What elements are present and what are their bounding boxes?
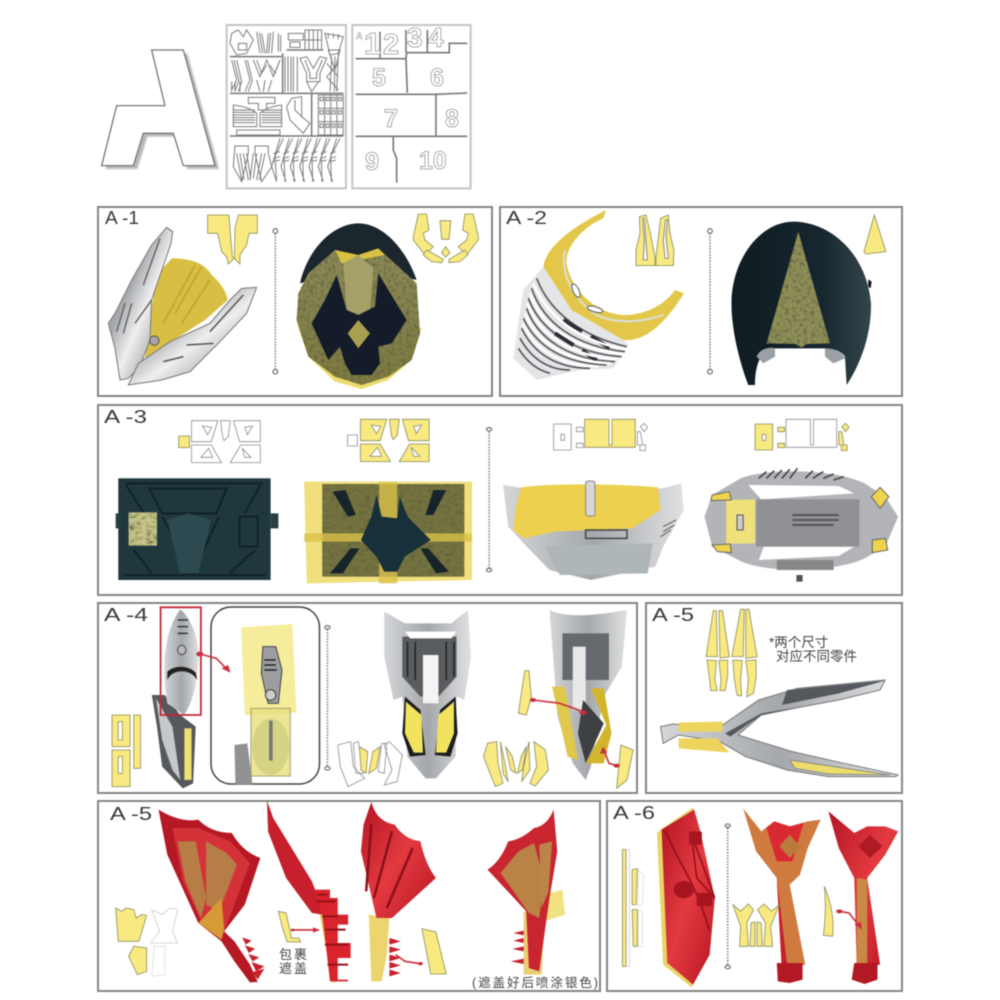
sheet: numbered section map: A: [356, 31, 363, 41]
sheet: numbered section map: 10: [419, 147, 447, 175]
sheet: numbered section map: [352, 22, 471, 188]
heading: A-5: A -5: [652, 605, 694, 625]
note: wrap and cover: [279, 947, 309, 976]
divider: dotted line: [708, 229, 712, 374]
template: white and yellow inner masks: [338, 742, 402, 787]
template: yellow strip mask: [422, 929, 446, 974]
part: chest plate rear view with yellow pieces: [704, 468, 898, 582]
template: large yellow rectangle mask: [554, 419, 648, 451]
panel: A-1: [98, 207, 492, 396]
arrow: red pointer to detail: [196, 652, 230, 673]
note: wrap and cover: 包裹: [279, 947, 309, 962]
template: tall yellow masks: [706, 609, 757, 697]
template: yellow crest masks: [636, 215, 674, 266]
note: two sizes for different parts: *两个尺寸: [769, 635, 828, 650]
part: dark panel with small patch: [116, 478, 278, 580]
sheet: numbered section map: 3: [407, 22, 423, 53]
part: ribbed silver crest with tape: [513, 210, 684, 380]
part: red fin inner taped: [159, 810, 264, 982]
part: red fin side with teeth: [267, 801, 351, 983]
heading: A-1: A -1: [105, 208, 139, 228]
sheet: full cut template layout: [227, 25, 346, 188]
sheet: numbered section map: 6: [430, 64, 444, 92]
template: yellow panel masks with white square: [348, 419, 429, 462]
sheet: numbered section map: 7: [384, 105, 398, 133]
panel: A-2: [500, 207, 902, 396]
divider: dotted line: [325, 626, 330, 770]
template: yellow Y masks: [733, 904, 779, 946]
sheet: numbered section map: 9: [365, 148, 379, 176]
template: yellow side masks with red arrows: [483, 671, 633, 788]
panel: A-4: [98, 603, 637, 793]
template: yellow wrap mask with arrow: [278, 911, 320, 942]
template: yellow and white fin masks: [116, 908, 178, 976]
sheet: numbered section map: 1: [364, 26, 381, 61]
divider: dotted line: [273, 229, 278, 374]
panel: A-6: [607, 801, 902, 991]
divider: dotted line: [725, 824, 730, 969]
part: red fin rear taped: [488, 810, 565, 975]
panel: A-5 lower: [98, 801, 600, 991]
template: yellow curved mask with arrow: [823, 886, 862, 936]
part: fully taped panel: [304, 482, 472, 583]
heading: A-2: A -2: [506, 208, 547, 228]
part: red Y piece masked: [743, 809, 821, 983]
panel: A-3: [98, 405, 902, 595]
part: silver piece side with tape: [550, 610, 627, 780]
part: red shield: [657, 807, 715, 987]
note: wrap and cover: 遮盖: [279, 961, 309, 976]
template: yellow visor masks: [208, 215, 257, 264]
note: second line: 对应不同零件: [776, 648, 857, 664]
template: thin strip masks: [622, 850, 644, 966]
note: spray silver after masking: (遮盖好后喷涂银色): [472, 975, 598, 990]
template: white panel masks with yellow square: [179, 421, 260, 463]
sheet: numbered section map: 5: [372, 64, 386, 92]
part: red Y piece: [828, 811, 898, 984]
part: dark shell with triangle mask: [731, 222, 872, 385]
template: small yellow masks: [755, 419, 849, 451]
part: silver visor with tape: [108, 227, 257, 385]
part: silver pincer with masked tips: [661, 680, 898, 777]
divider: dotted line: [487, 428, 492, 572]
icon: large letter A: [102, 50, 219, 169]
part: masked helmet top: [295, 223, 422, 389]
template: yellow slot masks: [112, 715, 140, 787]
callout: zoomed detail frame: [211, 607, 320, 784]
template: yellow triangle mask: [864, 215, 886, 254]
panel: A-5 upper: [646, 603, 902, 793]
heading: A-4: A -4: [104, 605, 148, 625]
sheet: numbered section map: 2: [383, 29, 399, 61]
template: yellow helmet masks: [413, 214, 478, 263]
heading: A-3: A -3: [104, 407, 147, 427]
part: silver front piece with yellow inserts: [384, 610, 471, 778]
sheet: numbered section map: 4: [428, 22, 444, 53]
part: side piece with red highlight: [152, 607, 201, 788]
heading: A-5: A -5: [110, 804, 152, 824]
part: chest plate top view with tape: [503, 481, 684, 580]
sheet: numbered section map: 8: [445, 105, 459, 133]
heading: A-6: A -6: [613, 803, 655, 823]
part: red fin outer: [361, 802, 436, 981]
